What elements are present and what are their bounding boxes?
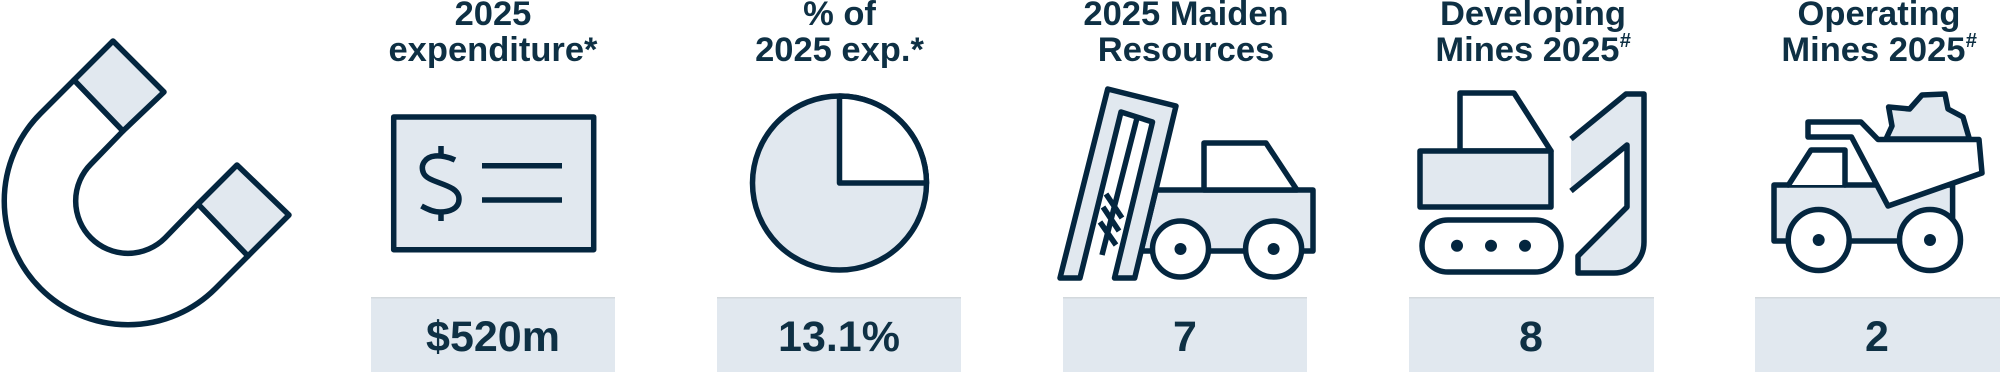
value box: 7: 7 bbox=[1173, 313, 1197, 361]
value box: 7 bbox=[1063, 297, 1307, 372]
icon: pie chart bbox=[752, 96, 926, 270]
heading: % of 2025 exp.: 2025 exp.* bbox=[755, 31, 924, 69]
panel: operating mines 2025 bbox=[1755, 0, 2000, 372]
value box: 8 bbox=[1409, 297, 1654, 372]
value box: 2: 2 bbox=[1865, 313, 1889, 361]
icon: forklift drill rig bbox=[1060, 89, 1313, 278]
heading: Operating Mines 2025: # bbox=[1965, 30, 1977, 52]
panel: developing mines 2025 bbox=[1409, 0, 1654, 372]
heading: Developing Mines 2025: Mines 2025 bbox=[1435, 30, 1631, 69]
value box: 13.1% bbox=[717, 297, 961, 372]
value box: $520m bbox=[371, 297, 615, 372]
icon: horseshoe magnet bbox=[4, 41, 289, 325]
value box: $520m: $520m bbox=[426, 313, 560, 361]
value box: 8: 8 bbox=[1519, 313, 1543, 361]
panel: 2025 expenditure bbox=[371, 0, 615, 372]
value box: 13.1%: 13.1% bbox=[778, 313, 900, 361]
heading: Operating Mines 2025: Mines 2025 bbox=[1781, 30, 1977, 69]
value box: 2 bbox=[1755, 297, 2000, 372]
icon: excavator bbox=[1420, 93, 1644, 273]
heading: 2025 Maiden Resources: Resources bbox=[1098, 31, 1274, 69]
panel: percent of 2025 expenditure bbox=[717, 0, 961, 372]
icon: banknote with dollar sign bbox=[394, 117, 594, 250]
heading: 2025 expenditure: expenditure* bbox=[389, 31, 598, 69]
panel: 2025 maiden resources bbox=[1060, 0, 1313, 372]
icon: dump truck bbox=[1774, 94, 1982, 270]
heading: Developing Mines 2025: # bbox=[1619, 30, 1631, 52]
